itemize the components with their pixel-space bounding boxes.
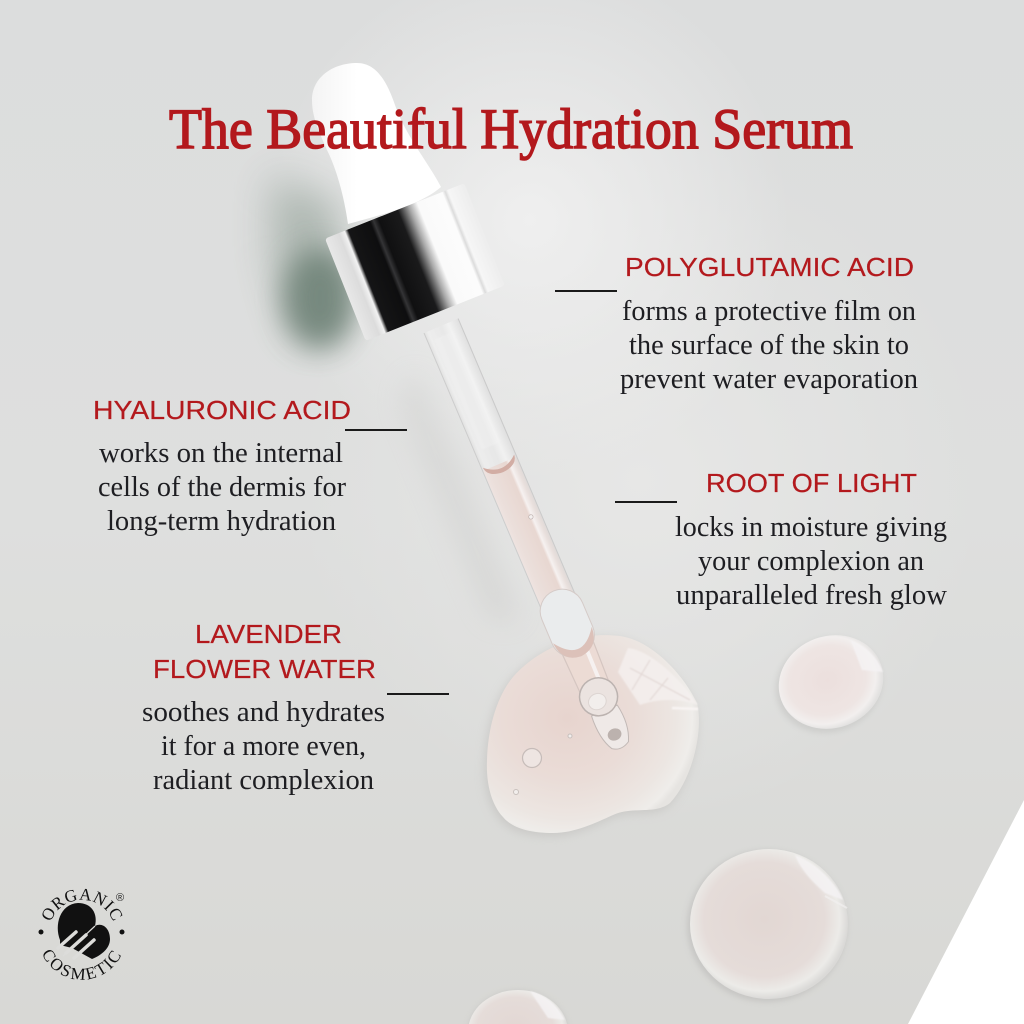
callout: polyglutamic acid: the surface of the skin to	[629, 329, 909, 361]
callout: polyglutamic acid: POLYGLUTAMIC ACID	[625, 252, 914, 282]
callout: root of light: unparalleled fresh glow	[676, 579, 947, 611]
drop: upper right	[762, 621, 897, 748]
callout: polyglutamic acid	[555, 252, 918, 395]
callout: hyaluronic acid: cells of the dermis for	[98, 471, 346, 503]
dropper	[312, 63, 641, 757]
callout: lavender flower water: soothes and hydrates	[142, 696, 385, 728]
callout: lavender flower water: it for a more even,	[161, 730, 366, 762]
serum puddle	[485, 635, 699, 836]
callout: lavender flower water: LAVENDER	[195, 619, 342, 649]
water drops	[468, 621, 897, 1024]
organic cosmetic badge: ®	[116, 892, 124, 904]
puddle bubbles	[522, 748, 542, 768]
callout: polyglutamic acid: forms a protective film on	[622, 295, 916, 327]
callout: lavender flower water: radiant complexion	[153, 764, 374, 796]
drop: bottom	[468, 990, 568, 1024]
title: The Beautiful Hydration Serum	[169, 98, 853, 161]
puddle window reflection	[618, 648, 698, 709]
callout: root of light: ROOT OF LIGHT	[706, 468, 917, 498]
dropper shadow	[272, 175, 520, 620]
callout: hyaluronic acid: works on the internal	[99, 437, 343, 469]
callout: hyaluronic acid: long-term hydration	[107, 505, 336, 537]
callout: lavender flower water: FLOWER WATER	[153, 654, 376, 684]
pipette tip	[591, 705, 635, 754]
glass bubble in pipette	[533, 582, 601, 664]
callout: root of light	[615, 468, 947, 611]
callout: polyglutamic acid: prevent water evaporation	[620, 363, 918, 395]
callout: hyaluronic acid: HYALURONIC ACID	[93, 395, 351, 425]
organic cosmetic badge: COSMETIC	[43, 950, 121, 980]
silver collar	[325, 183, 505, 341]
drop: lower right	[687, 849, 848, 1002]
white corner triangle	[908, 800, 1024, 1024]
organic cosmetic badge	[38, 888, 124, 980]
callout: lavender flower water	[142, 619, 449, 796]
lower pipette in puddle	[546, 604, 616, 706]
callout: root of light: your complexion an	[698, 545, 924, 577]
organic cosmetic badge: ORGANIC	[42, 888, 122, 921]
callout: root of light: locks in moisture giving	[675, 511, 947, 543]
glass pipette	[421, 317, 641, 757]
callout: hyaluronic acid	[93, 395, 407, 537]
rubber bulb	[312, 63, 441, 224]
